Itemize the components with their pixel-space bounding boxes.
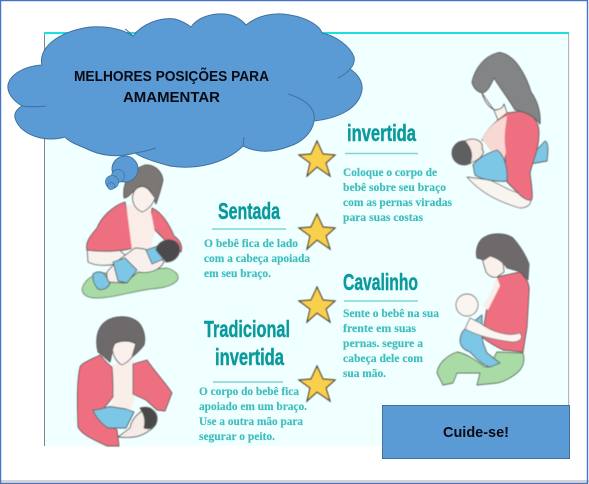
heading: Tradicional invertida: Tradicional: [204, 316, 290, 342]
callout box: Cuide-se!: [382, 406, 570, 458]
heading: Tradicional invertida: [204, 316, 290, 382]
text: Tradicional invertida description: O corpo do bebê fica: [199, 386, 299, 398]
text: Tradicional invertida description: Use a outra mão para: [199, 416, 303, 428]
icon: star 1: [299, 141, 335, 176]
text: Cavalinho description: cabeça dele com: [343, 353, 423, 365]
text: Tradicional invertida description: segurar o peito.: [199, 431, 275, 443]
text: Sentada description: O bebê fica de lado: [204, 238, 298, 250]
text: Sentada description: com a cabeça apoiada: [204, 253, 310, 265]
icon: star 3: [299, 287, 335, 322]
text: invertida description: com as pernas viradas: [343, 197, 453, 209]
title: AMAMENTAR: [123, 89, 220, 106]
text: Cavalinho description: Sente o bebê na sua: [343, 308, 439, 320]
text: invertida description: Coloque o corpo de: [343, 167, 437, 179]
illustration: mother with baby, inverted position: [452, 53, 548, 208]
heading: Tradicional invertida: invertida: [215, 344, 284, 370]
text: Cavalinho description: frente em suas: [343, 323, 417, 335]
heading: invertida: [345, 120, 418, 154]
illustration: mother holding baby, traditional position: [77, 317, 172, 446]
text: Cavalinho description: pernas. segure a: [343, 338, 423, 350]
title: MELHORES POSIÇÕES PARA: [74, 67, 269, 85]
heading: invertida: invertida: [347, 120, 416, 146]
text: Tradicional invertida description: apoiado em um braço.: [199, 401, 307, 413]
illustration: seated mother with baby on green pillow: [82, 165, 182, 298]
icon: star 4: [299, 366, 335, 401]
text: Cavalinho description: sua mão.: [343, 368, 386, 380]
heading: Sentada: Sentada: [218, 198, 280, 224]
text: invertida description: bebê sobre seu braço: [343, 182, 446, 194]
heading: Cavalinho: Cavalinho: [343, 269, 418, 295]
panel: infographic background: [44, 32, 569, 446]
illustration: mother with baby on her lap, straddle position: [437, 234, 529, 385]
icon: star 2: [299, 214, 335, 249]
text: Sentada description: em seu braço.: [204, 268, 271, 280]
thought cloud with title: [8, 14, 362, 190]
text: invertida description: para suas costas: [343, 212, 424, 224]
callout box: Cuide-se!: Cuide-se!: [443, 424, 509, 441]
heading: Cavalinho: [343, 269, 418, 301]
heading: Sentada: [212, 198, 286, 229]
